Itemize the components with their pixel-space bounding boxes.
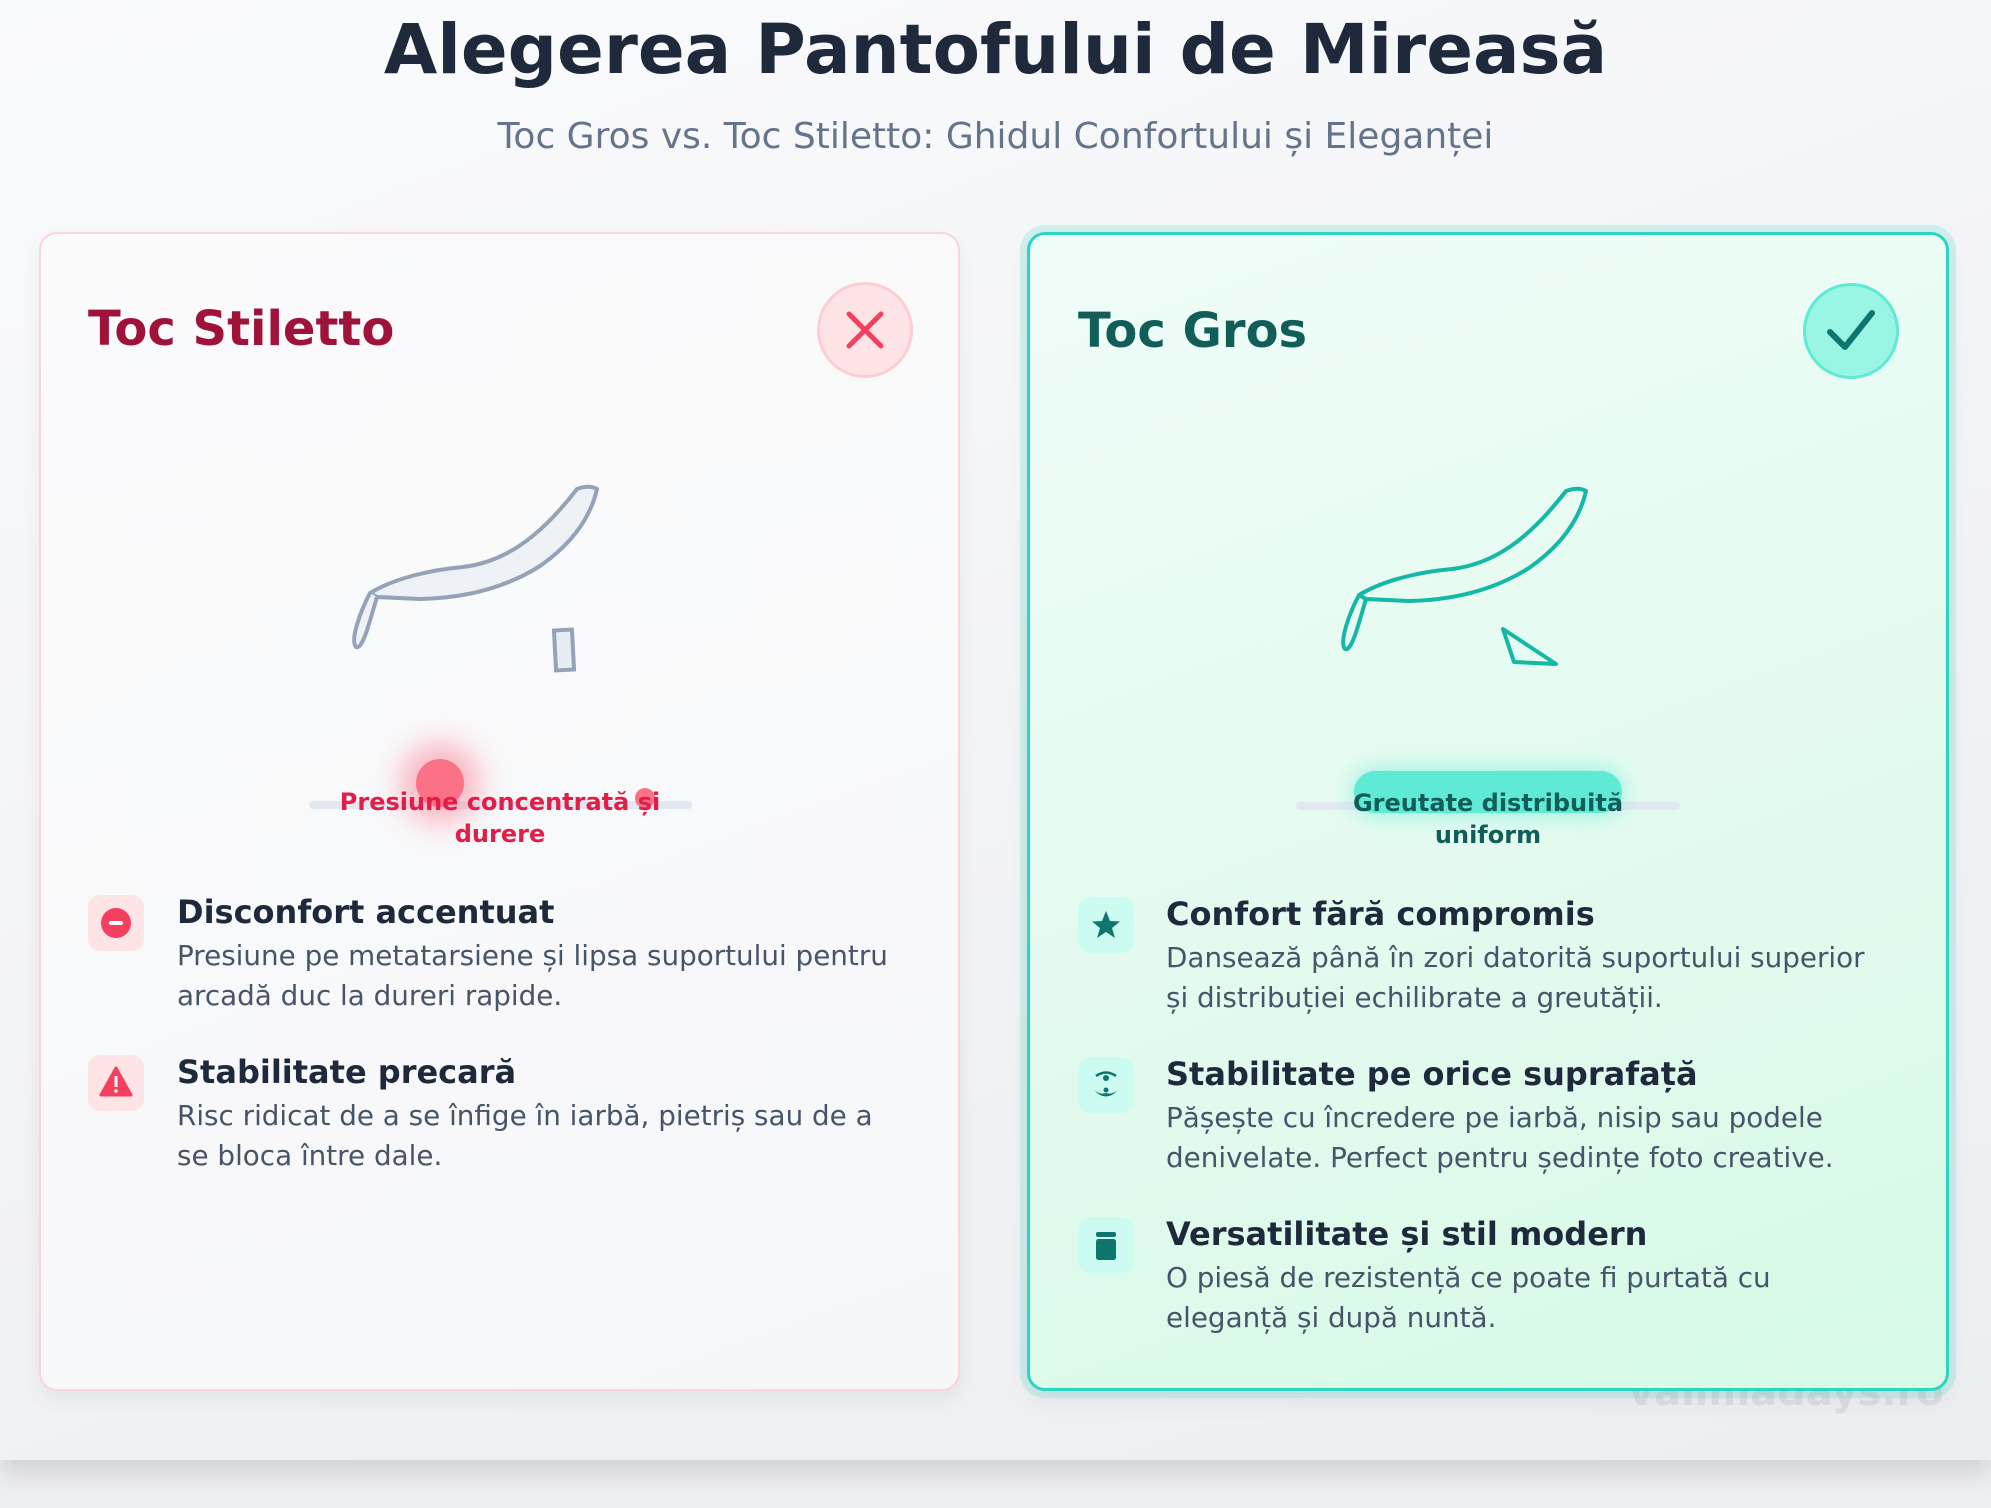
- item: disconfort: Disconfort accentuat: [177, 893, 554, 931]
- item: versatilitate: Versatilitate și stil modern: [1166, 1215, 1647, 1253]
- item: confort: Dansează până în zori datorită suportului superior: [1166, 941, 1865, 974]
- item: stabilitate precara: Stabilitate precară: [177, 1053, 516, 1091]
- heading: Toc Stiletto: Toc Stiletto: [88, 301, 394, 357]
- illustration: stiletto shoe: Presiune concentrată și: [340, 788, 660, 816]
- heading: Toc Gros: Toc Gros: [1078, 303, 1307, 359]
- panel: stiletto: [39, 232, 960, 1391]
- illustration: block heel shoe: Greutate distribuită: [1353, 789, 1623, 817]
- icon: cylinder: [1078, 1217, 1134, 1273]
- illustration: block heel shoe: [1296, 486, 1680, 849]
- item: stabilitate: [1078, 1055, 1834, 1174]
- item: disconfort: Presiune pe metatarsiene și lipsa suportului pentru: [177, 939, 888, 972]
- icon: minus circle: [88, 895, 144, 951]
- icon: star: [1078, 897, 1134, 953]
- item: versatilitate: eleganță și după nuntă.: [1166, 1300, 1496, 1334]
- icon: balance: [1078, 1057, 1134, 1113]
- item: stabilitate: Pășește cu încredere pe iarbă, nisip sau podele: [1166, 1101, 1823, 1134]
- item: stabilitate precara: se bloca între dale.: [177, 1138, 442, 1172]
- icon: check circle: [1803, 283, 1899, 379]
- item: stabilitate precara: [88, 1053, 873, 1172]
- icon: warning: [88, 1055, 144, 1111]
- item: stabilitate precara: Risc ridicat de a se înfige în iarbă, pietriș sau de a: [177, 1099, 873, 1132]
- item: versatilitate: [1078, 1215, 1771, 1334]
- subtitle: Toc Gros vs. Toc Stiletto: Ghidul Confortului și Eleganței: [498, 116, 1493, 157]
- watermark: valimadays.ro: [1628, 1369, 1944, 1415]
- item: confort: și distribuției echilibrate a greutății.: [1166, 980, 1663, 1014]
- item: stabilitate: denivelate. Perfect pentru ședințe foto creative.: [1166, 1140, 1834, 1174]
- item: stabilitate: Stabilitate pe orice suprafață: [1166, 1055, 1698, 1093]
- illustration: stiletto shoe: [309, 484, 692, 848]
- item: confort: [1078, 895, 1865, 1014]
- icon: X circle: [817, 282, 913, 378]
- title: Alegerea Pantofului de Mireasă: [384, 10, 1607, 90]
- panel: toc gros: [1027, 232, 1949, 1391]
- item: confort: Confort fără compromis: [1166, 895, 1595, 933]
- item: disconfort: arcadă duc la dureri rapide.: [177, 978, 562, 1012]
- item: disconfort: [88, 893, 888, 1012]
- illustration: stiletto shoe: durere: [455, 820, 545, 848]
- illustration: block heel shoe: uniform: [1435, 821, 1541, 849]
- item: versatilitate: O piesă de rezistență ce poate fi purtată cu: [1166, 1261, 1771, 1294]
